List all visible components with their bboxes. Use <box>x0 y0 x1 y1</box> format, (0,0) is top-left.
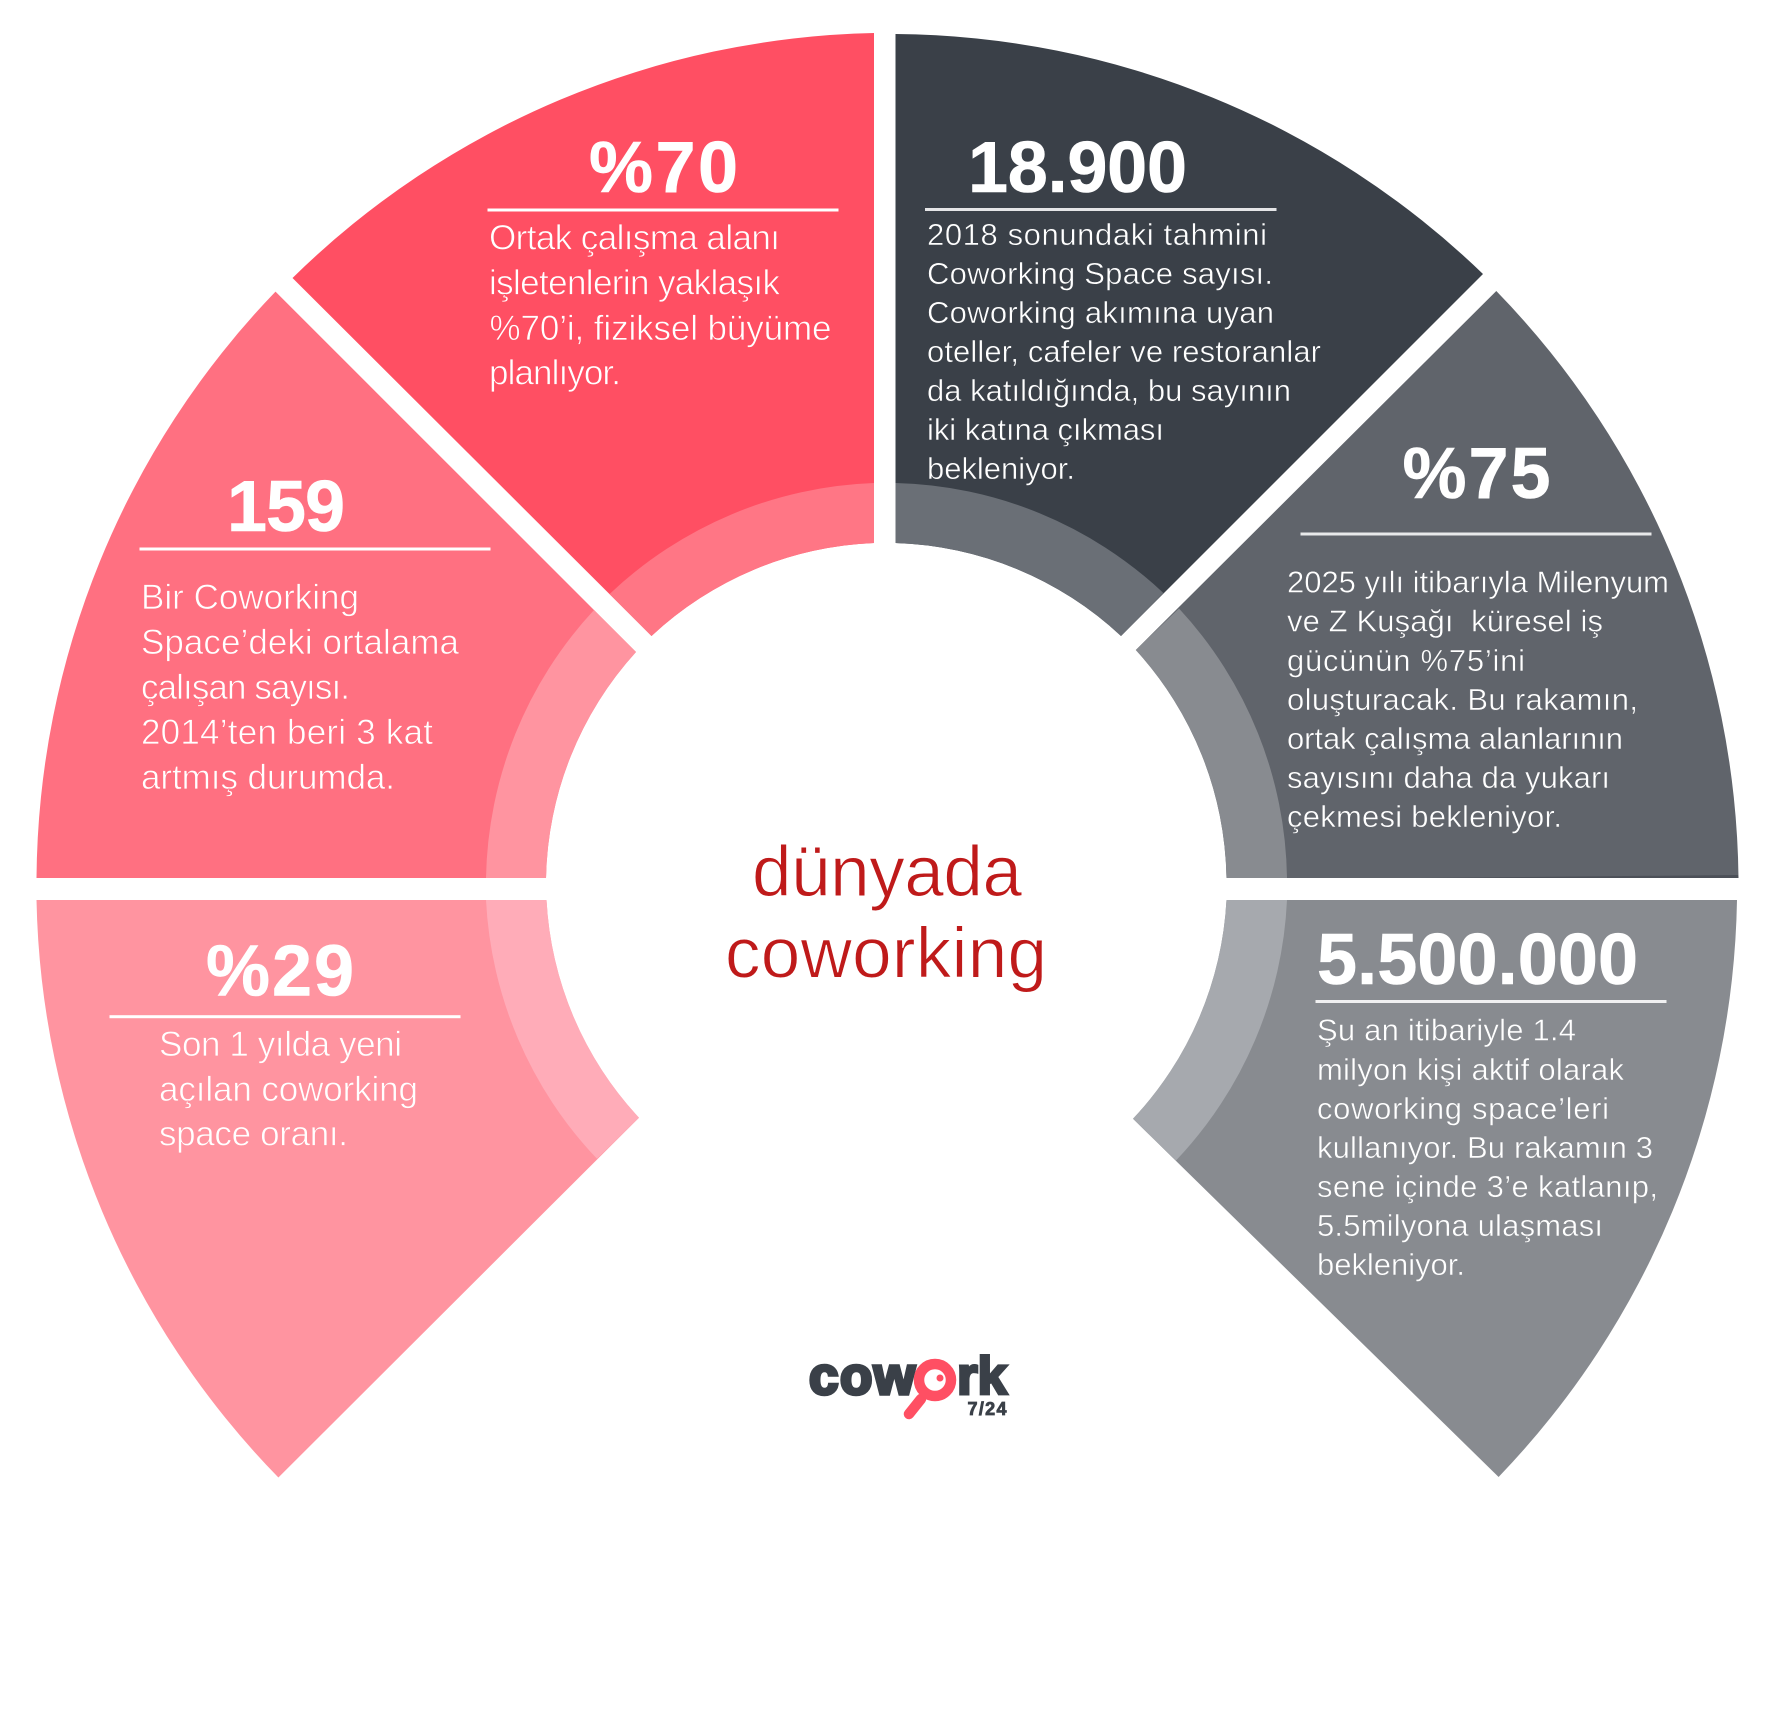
description: 5.500.000: sene içinde 3’e katlanıp, <box>1317 1169 1658 1204</box>
sector: 18.900 with inner ring <box>896 34 1483 636</box>
description: %70: işletenlerin yaklaşık <box>489 264 780 302</box>
description: 18.900: Coworking akımına uyan <box>927 295 1274 330</box>
logo: cowork 7/24 <box>809 1347 1008 1419</box>
sector: %29 with inner ring <box>36 900 639 1478</box>
sector: 159 with inner ring <box>36 292 636 878</box>
stat: %70: %70 <box>589 128 738 208</box>
description: 18.900: iki katına çıkması <box>927 412 1164 447</box>
description: 5.500.000: kullanıyor. Bu rakamın 3 <box>1317 1130 1653 1165</box>
description: %70: Ortak çalışma alanı <box>489 218 780 258</box>
description: %70: planlıyor. <box>489 354 621 393</box>
panel: 5.500.000 users <box>1133 900 1737 1477</box>
description: %29: Son 1 yılda yeni <box>159 1025 402 1064</box>
description: 5.500.000 <box>1317 1012 1658 1282</box>
description: 159: artmış durumda. <box>141 758 395 797</box>
stat: 18.900: 18.900 <box>968 128 1187 208</box>
sector: %70 with inner ring <box>292 33 874 636</box>
panel: %29 new spaces <box>36 900 639 1478</box>
description: %70 <box>489 218 832 393</box>
sector: 5.500.000 with inner ring <box>1133 900 1737 1477</box>
panel: 159 employees <box>36 292 636 878</box>
logo: cowork 7/24: 7/24 <box>968 1399 1006 1419</box>
logo: cowork 7/24: rk <box>957 1347 1008 1406</box>
description: 18.900: bekleniyor. <box>927 451 1075 486</box>
description: 18.900 <box>927 217 1321 486</box>
description: 159: 2014’ten beri 3 kat <box>141 713 433 752</box>
description: 5.500.000: bekleniyor. <box>1317 1247 1465 1282</box>
description: %75: ortak çalışma alanlarının <box>1287 721 1623 756</box>
panel: 18.900 spaces <box>896 34 1483 636</box>
description: %75 <box>1287 564 1669 834</box>
description: 18.900: Coworking Space sayısı. <box>927 256 1273 291</box>
description: %29: space oranı. <box>159 1115 348 1154</box>
stat: 159: 159 <box>227 467 345 547</box>
description: 159: çalışan sayısı. <box>141 668 350 707</box>
stat: %29: %29 <box>206 932 354 1012</box>
title: dünyada coworking: dünyada <box>752 833 1022 912</box>
description: %75: çekmesi bekleniyor. <box>1287 799 1562 834</box>
description: %75: ve Z Kuşağı küresel iş <box>1287 604 1603 638</box>
description: 18.900: da katıldığında, bu sayının <box>927 373 1291 408</box>
stat: 5.500.000: 5.500.000 <box>1317 920 1638 1000</box>
description: %70: %70’i, fiziksel büyüme <box>490 309 832 348</box>
description: %75: oluşturacak. Bu rakamın, <box>1287 682 1638 717</box>
description: %29 <box>159 1025 418 1154</box>
description: 159: Bir Coworking <box>141 578 359 617</box>
description: 159: Space’deki ortalama <box>141 623 460 662</box>
icon: magnifier with eye <box>909 1364 951 1414</box>
panel: %75 generation share <box>1136 291 1738 878</box>
description: 18.900: 2018 sonundaki tahmini <box>927 217 1267 252</box>
stat: %75: %75 <box>1402 434 1550 514</box>
description: %75: gücünün %75’ini <box>1287 643 1525 678</box>
description: %29: açılan coworking <box>159 1070 418 1109</box>
description: 5.500.000: coworking space’leri <box>1317 1091 1609 1126</box>
description: 18.900: oteller, cafeler ve restoranlar <box>927 334 1321 369</box>
title: dünyada coworking: coworking <box>725 914 1047 993</box>
description: %75: sayısını daha da yukarı <box>1287 760 1610 795</box>
description: %75: 2025 yılı itibarıyla Milenyum <box>1287 564 1669 600</box>
description: 159 <box>141 578 460 797</box>
logo: cowork 7/24: cow <box>809 1347 916 1406</box>
panel: %70 growth plans <box>292 33 874 636</box>
description: 5.500.000: 5.5milyona ulaşması <box>1317 1208 1603 1243</box>
description: 5.500.000: Şu an itibariyle 1.4 <box>1317 1012 1576 1048</box>
sector: %75 with inner ring <box>1136 291 1738 878</box>
description: 5.500.000: milyon kişi aktif olarak <box>1317 1052 1624 1087</box>
title: dünyada coworking <box>725 833 1047 993</box>
